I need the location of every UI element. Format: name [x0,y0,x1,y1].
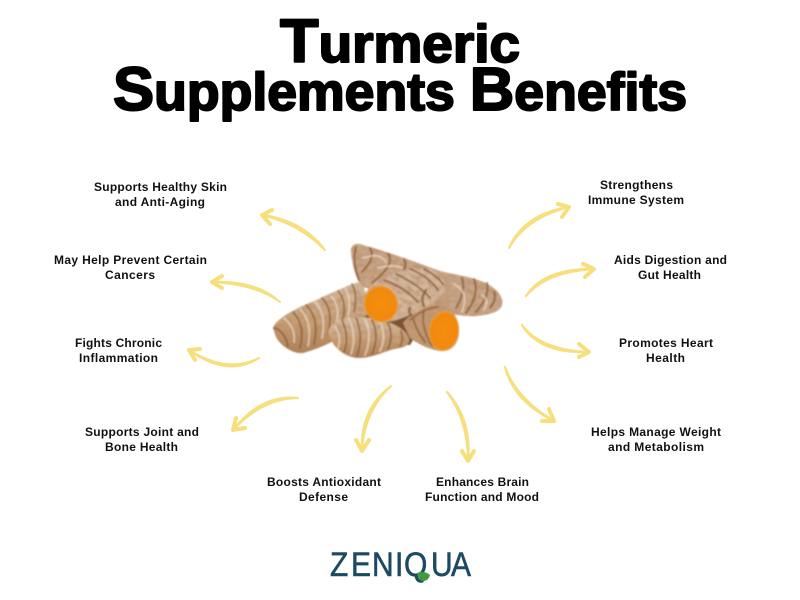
label: joints [85,425,199,454]
label: antioxidant [267,475,381,504]
turmeric root photo illustration [273,244,502,358]
arrow: digestion and gut health [526,264,594,296]
logo: Zeniqua: ZENIQUA [330,545,472,583]
label: immune [588,178,684,207]
front cut rhizome [360,268,445,326]
label: cancers: Cancers [105,268,155,282]
label: digestion: Gut Health [638,268,701,282]
label: antioxidant: Boosts Antioxidant [267,475,381,489]
label: brain: Enhances Brain [436,475,529,489]
label: brain [425,475,539,504]
left rhizome [273,282,368,353]
label: heart: Health [646,351,685,365]
lower rhizome [328,317,409,358]
arrow: immune system [509,204,569,248]
arrow: brain function [447,392,474,461]
label: immune: Strengthens [600,178,673,192]
label: heart: Promotes Heart [619,336,713,350]
label: heart [619,336,713,365]
label: skin: Supports Healthy Skin [94,180,227,194]
title [113,7,687,123]
title: Supplements Benefits [113,55,687,123]
label: digestion: Aids Digestion and [614,253,727,267]
lower right cut rhizome [403,305,462,353]
label: immune: Immune System [588,193,684,207]
label: antioxidant: Defense [299,490,348,504]
arrow: joint and bone health [233,398,298,430]
icon: leaf [417,572,430,581]
label: weight: and Metabolism [608,440,704,454]
label: cancers [54,253,207,282]
arrow: supports healthy skin [262,210,325,250]
label: skin [94,180,227,209]
label: skin: and Anti-Aging [115,195,205,209]
label: brain: Function and Mood [425,490,539,504]
arrow: weight and metabolism [505,367,554,421]
arrow: chronic inflammation [189,349,259,366]
title: Turmeric [280,7,520,75]
arrow: heart health [522,325,589,357]
label: joints: Supports Joint and [85,425,199,439]
label: inflammation: Fights Chronic [75,336,162,350]
label: weight: Helps Manage Weight [591,425,721,439]
label: joints: Bone Health [105,440,178,454]
shadow between rhizomes [340,290,432,345]
label: digestion [614,253,727,282]
label: weight [591,425,721,454]
cut face [426,309,462,353]
label: inflammation: Inflammation [79,351,158,365]
arrow: prevent cancers [212,276,280,302]
label: inflammation [75,336,162,365]
label: cancers: May Help Prevent Certain [54,253,207,267]
cut face [360,282,402,326]
back rhizome [351,244,502,316]
arrow: antioxidant defense [356,386,391,451]
